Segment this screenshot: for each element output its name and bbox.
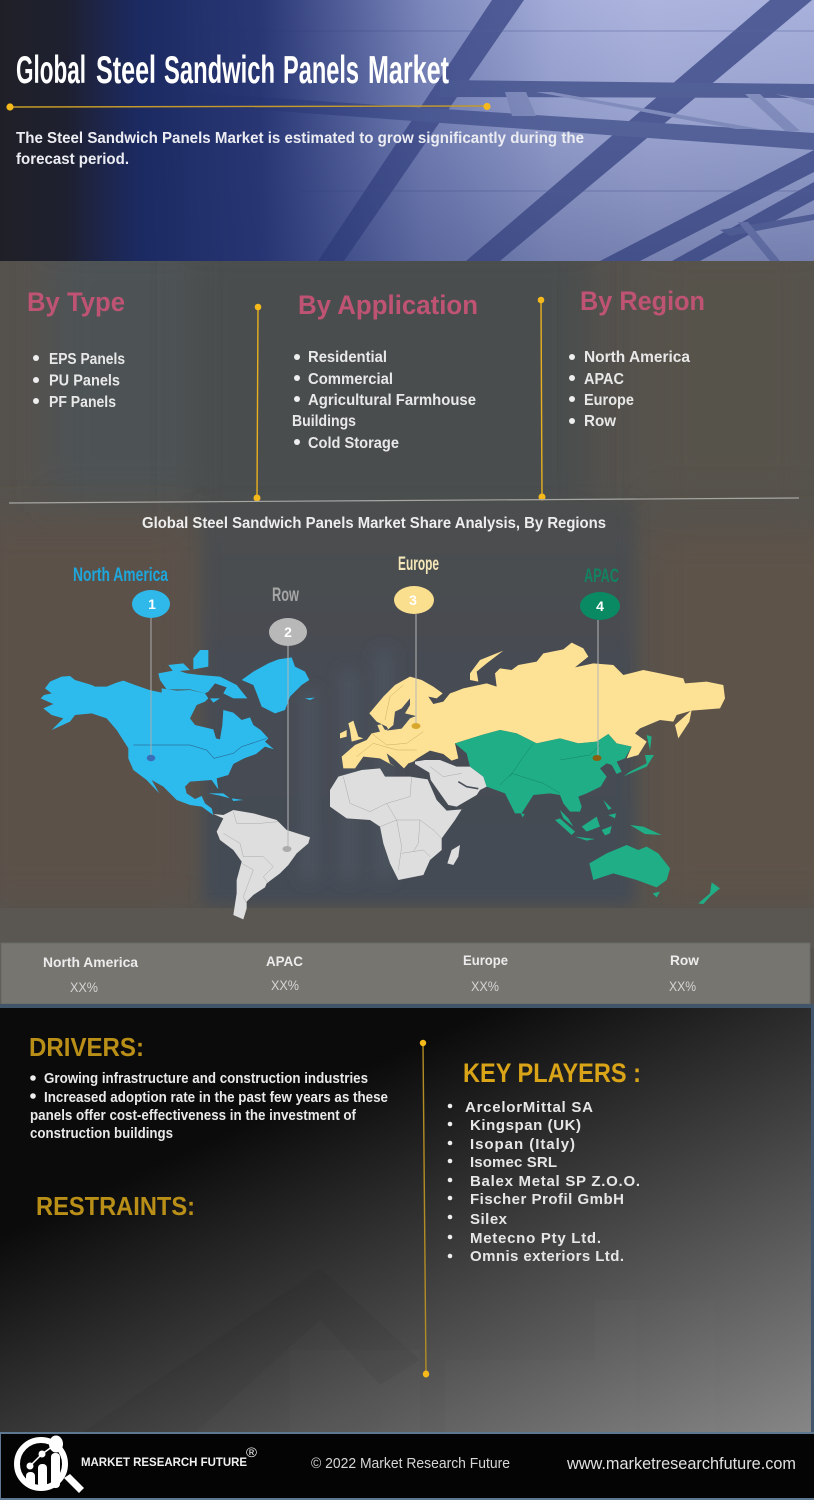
table column: apac: XX%	[271, 977, 299, 993]
callout: europe: 3	[409, 592, 417, 608]
panel: hero header	[0, 0, 814, 261]
table column: europe	[463, 952, 508, 994]
title: Steel	[96, 49, 156, 92]
list: company names: Omnis exteriors Ltd.	[470, 1248, 624, 1265]
callout: row	[269, 585, 307, 852]
table column: europe: Europe	[463, 952, 508, 968]
list: application items: Commercial	[308, 371, 393, 388]
text: driver list	[30, 1071, 388, 1142]
list: company names: Balex Metal SP Z.O.O.	[470, 1173, 640, 1190]
list: company names: Isopan (Italy)	[470, 1136, 575, 1153]
heading: by application: By Application	[298, 290, 478, 320]
title: Panels	[283, 49, 359, 92]
text: driver list: Growing infrastructure and construction industries	[44, 1071, 368, 1087]
list: company names: Isomec SRL	[470, 1154, 557, 1171]
callout: europe	[394, 554, 439, 729]
list: application items: Buildings	[292, 413, 356, 430]
divider: type and application	[254, 304, 261, 502]
list: region items: Europe	[584, 392, 634, 409]
panel: by region	[569, 286, 705, 430]
title underline with end dots	[6, 103, 491, 111]
list: type items: PU Panels	[49, 372, 120, 390]
table column: apac: APAC	[266, 953, 303, 969]
callout: europe: Europe	[398, 554, 439, 575]
list: application items: Agricultural Farmhouse	[308, 392, 476, 409]
panel: drivers restraints and key players background	[0, 1004, 814, 1500]
divider: key players	[420, 1040, 429, 1378]
website: www.marketresearchfuture.com	[566, 1454, 796, 1473]
table column: north america: XX%	[70, 979, 98, 995]
list: region items: Row	[584, 413, 617, 430]
heading: key players: KEY PLAYERS :	[463, 1058, 641, 1088]
table column: north america: North America	[43, 954, 138, 970]
icon: market research future logo	[17, 1436, 84, 1493]
title	[16, 49, 449, 92]
hero description: The Steel Sandwich Panels Market is estimated to grow significantly during the	[16, 130, 584, 147]
list: company names: Metecno Pty Ltd.	[470, 1230, 601, 1247]
map: africa and middle east	[330, 760, 487, 880]
divider: application and region	[538, 297, 546, 500]
title: Sandwich	[164, 49, 275, 92]
callout: apac: 4	[596, 598, 604, 614]
callout: north america	[73, 565, 170, 761]
list: company names: ArcelorMittal SA	[465, 1099, 593, 1116]
panel: regional share table	[1, 943, 810, 1004]
list: type items: PF Panels	[49, 394, 116, 411]
list: application items: Residential	[308, 349, 387, 366]
table column: north america	[43, 954, 138, 995]
panel: drivers	[29, 1032, 388, 1142]
list: company names	[448, 1099, 640, 1265]
chart heading: Global Steel Sandwich Panels Market Share Analysis, By Regions	[142, 515, 606, 532]
table column: row: XX%	[669, 978, 696, 994]
heading: by type: By Type	[27, 287, 125, 317]
callout: north america: North America	[73, 565, 168, 586]
list: company names: Kingspan (UK)	[470, 1117, 581, 1134]
text: driver list: panels offer cost-effectiveness in the investment of	[30, 1108, 356, 1124]
list: region items: APAC	[584, 371, 624, 388]
list: type items	[33, 351, 125, 411]
list: region items: North America	[584, 349, 690, 366]
callout: row: Row	[272, 585, 299, 606]
heading: by region: By Region	[580, 286, 705, 316]
heading: restraints: RESTRAINTS:	[36, 1191, 195, 1221]
text: driver list: Increased adoption rate in the past few years as these	[44, 1090, 388, 1106]
callout: north america: 1	[148, 596, 156, 612]
panel: market segments and map background	[0, 240, 814, 1006]
world map	[41, 643, 725, 919]
callout: apac: APAC	[584, 566, 619, 587]
text: driver list: construction buildings	[30, 1126, 173, 1142]
title: Global	[16, 49, 86, 92]
callout: row: 2	[284, 624, 292, 640]
list: company names: Silex	[470, 1211, 508, 1228]
list: application items: Cold Storage	[308, 435, 399, 452]
list: application items	[292, 349, 476, 452]
hero description	[16, 130, 584, 168]
map: south america	[213, 810, 310, 919]
copyright: © 2022 Market Research Future	[311, 1455, 510, 1472]
table column: europe: XX%	[471, 978, 499, 994]
list: region items	[569, 349, 690, 430]
table column: apac	[266, 953, 303, 993]
map: north america	[41, 650, 315, 815]
panel: key players	[448, 1058, 641, 1265]
hero description: forecast period.	[16, 151, 129, 168]
brand name: MARKET RESEARCH FUTURE	[81, 1455, 247, 1469]
map: asia pacific	[455, 730, 720, 904]
table column: row: Row	[670, 952, 699, 968]
panel: by type	[27, 287, 125, 411]
list: type items: EPS Panels	[49, 351, 125, 368]
heading: drivers: DRIVERS:	[29, 1032, 144, 1062]
map: europe and russia	[340, 643, 725, 768]
callout: apac	[580, 566, 620, 761]
panel: by application	[292, 290, 478, 452]
title: Market	[368, 49, 449, 92]
truss beams	[180, 80, 814, 261]
list: company names: Fischer Profil GmbH	[470, 1191, 624, 1208]
registered mark: ®	[246, 1444, 258, 1460]
panel: footer	[0, 1432, 814, 1500]
table column: row	[669, 952, 699, 994]
